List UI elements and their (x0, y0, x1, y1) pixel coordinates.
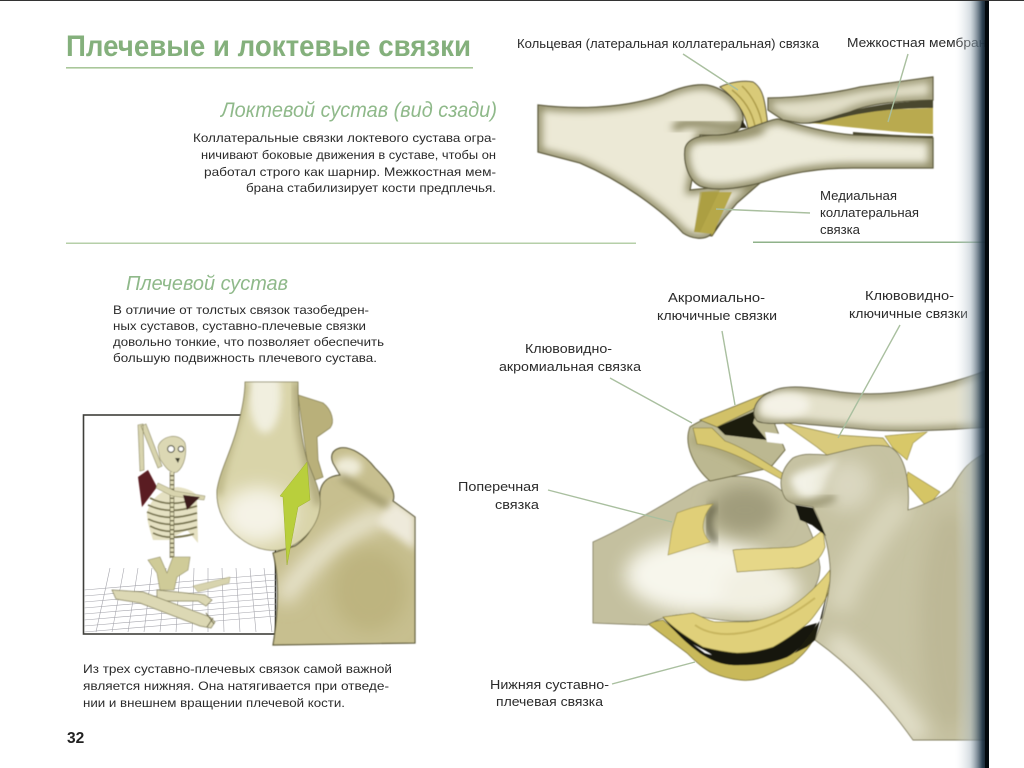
heading: shoulder joint: Плечевой сустав (126, 273, 288, 295)
arm muscle (138, 470, 157, 507)
label: annular ligament: Кольцевая (латеральная коллатеральная) связка (517, 37, 819, 51)
scapula (273, 448, 415, 645)
label: coracoclavicular ligaments: Клювовидно- (865, 289, 954, 303)
interosseous membrane (810, 108, 933, 134)
label: inferior glenohumeral ligament: Нижняя суставно- (490, 678, 609, 692)
label: medial collateral ligament (716, 189, 919, 237)
section divider lines (66, 242, 988, 244)
medial ligament front (694, 192, 732, 234)
label: acromioclavicular ligaments: Акромиально- (668, 291, 765, 305)
inner capsule band (663, 570, 830, 653)
label: inferior glenohumeral ligament (490, 662, 695, 709)
text block: shoulder description (113, 303, 384, 365)
radius bone (768, 77, 933, 123)
text block: lower ligament note: Из трех суставно-плечевых связок самой важной (83, 662, 392, 676)
text block: elbow description: ничивают боковые движения в суставе, чтобы он (201, 148, 496, 162)
label: medial collateral ligament: коллатеральная (820, 206, 919, 220)
label: medial collateral ligament: Медиальная (820, 189, 897, 203)
raised arm (138, 424, 162, 471)
label: annular ligament (517, 37, 819, 90)
text block: shoulder description: большую подвижность плечевого сустава. (113, 351, 377, 365)
page number: 32 (67, 730, 84, 747)
humerus (538, 85, 760, 238)
text block: shoulder description: В отличие от толстых связок тазобедрен- (113, 303, 369, 317)
superior band (733, 530, 825, 572)
conoid ligament (772, 415, 890, 455)
clavicle (754, 370, 988, 431)
skull (158, 436, 186, 473)
label: medial collateral ligament: связка (820, 223, 860, 237)
text block: lower ligament note: нии и внешнем вращении плечевой кости. (83, 696, 345, 710)
label: interosseous membrane (847, 36, 994, 122)
text block: shoulder description: ных суставов, суставно-плечевые связки (113, 319, 366, 333)
label: transverse ligament: связка (495, 498, 539, 512)
panel: skeleton inset (84, 415, 276, 634)
arrow (280, 462, 310, 565)
label: coracoclavicular ligaments (838, 289, 968, 438)
humerus and head (593, 476, 820, 625)
text block: elbow description: работал строго как шарнир. Межкостная мем- (204, 165, 496, 179)
text block: shoulder description: довольно тонкие, что позволяет обеспечить (113, 335, 384, 349)
label: acromioclavicular ligaments (657, 291, 777, 405)
shadow beside coracoid (795, 505, 826, 536)
label: interosseous membrane: Межкостная мембрана (847, 36, 994, 50)
illustration: shoulder close-up with arrow (217, 357, 415, 645)
dark cavity under acromion (717, 410, 767, 440)
acromioclavicular ligament (700, 392, 770, 427)
skeleton figure (112, 424, 230, 628)
label: coracoacromial ligament: акромиальная связка (499, 360, 641, 374)
illustration: shoulder joint (593, 370, 988, 740)
label: coracoclavicular ligaments: ключичные связки (849, 307, 968, 321)
acromion (688, 408, 785, 481)
inferior glenohumeral ligament outer band (647, 620, 817, 680)
text block: elbow description (193, 131, 496, 195)
scapula and coracoid (770, 445, 988, 740)
floor grid (84, 568, 276, 632)
label: coracoacromial ligament (499, 342, 692, 423)
pelvis (148, 557, 190, 590)
label: coracoacromial ligament: Клювовидно- (525, 342, 612, 356)
crossed legs (157, 590, 212, 606)
coracoacromial ligament (693, 428, 790, 480)
white gap between ligaments (765, 432, 813, 448)
heading: elbow joint: Локтевой сустав (вид сзади) (219, 99, 497, 122)
transverse ligament (668, 504, 713, 555)
rib cage (147, 487, 198, 543)
text block: lower ligament note (83, 662, 392, 710)
title: Плечевые и локтевые связки (66, 30, 471, 63)
annular ligament (720, 81, 768, 128)
text block: lower ligament note: является нижняя. Она натягивается при отведе- (83, 679, 389, 693)
text block: elbow description: брана стабилизирует кости предплечья. (246, 181, 496, 195)
text block: elbow description: Коллатеральные связки локтевого сустава огра- (193, 131, 496, 145)
label: transverse ligament (458, 480, 672, 522)
tubercle (298, 395, 332, 482)
black gap under capsule (662, 617, 817, 665)
folded arm (156, 483, 205, 500)
humeral head (216, 382, 320, 551)
label: acromioclavicular ligaments: ключичные связки (657, 309, 777, 323)
small right ligament bands (885, 432, 927, 460)
ulna (675, 119, 933, 189)
label: transverse ligament: Поперечная (458, 480, 539, 494)
medial collateral ligament (693, 190, 745, 236)
label: inferior glenohumeral ligament: плечевая связка (496, 695, 603, 709)
illustration: elbow joint (538, 77, 933, 238)
